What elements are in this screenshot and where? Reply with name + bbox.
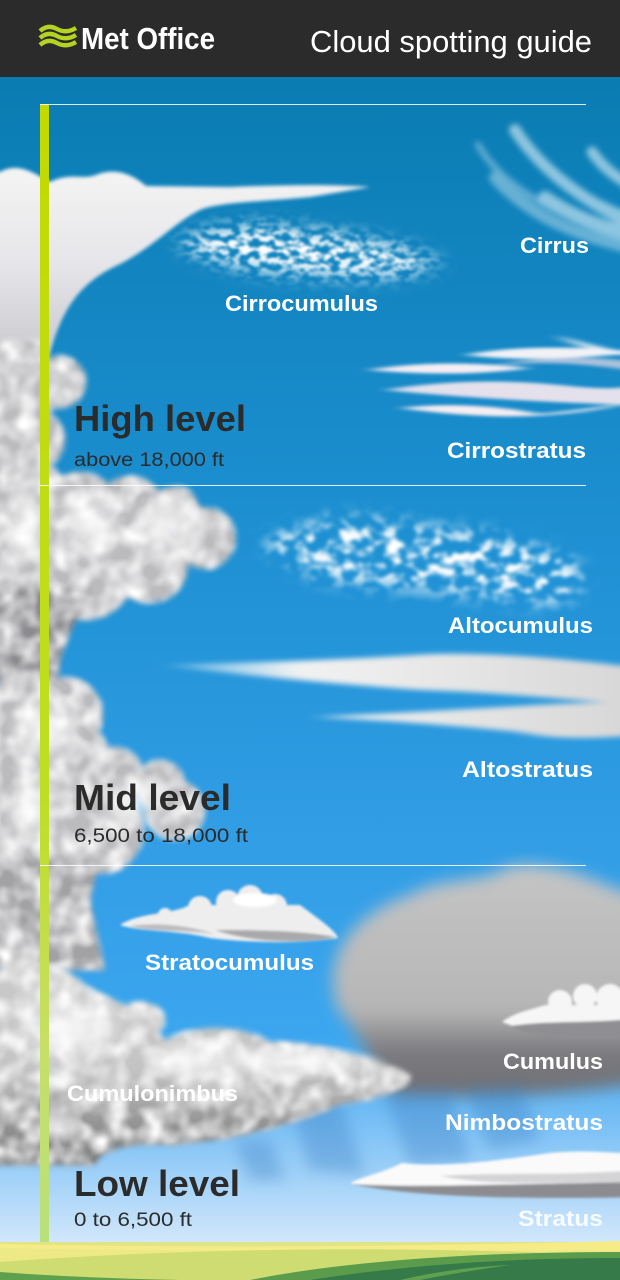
cloud: cumulus — [502, 984, 620, 1039]
heading: low level: 0 to 6,500 ft — [74, 1210, 193, 1231]
heading: mid level: Mid level — [74, 777, 231, 818]
label: Cirrus: Cirrus — [520, 233, 589, 258]
heading: low level — [74, 1163, 240, 1231]
label: Cumulus: Cumulus — [503, 1049, 603, 1074]
divider lines — [40, 104, 586, 866]
label: Stratus: Stratus — [518, 1206, 603, 1231]
cloud: nimbostratus — [333, 865, 620, 1096]
label: Altocumulus: Altocumulus — [448, 613, 593, 638]
cloud: cirrocumulus — [176, 225, 444, 278]
label: Altostratus: Altostratus — [462, 757, 593, 782]
cloud: altocumulus — [262, 519, 583, 603]
cloud: cirrostratus — [368, 335, 620, 416]
heading: low level: Low level — [74, 1163, 240, 1204]
heading: high level: above 18,000 ft — [74, 450, 225, 471]
heading: high level: High level — [74, 398, 246, 439]
puff highlights — [0, 485, 390, 1146]
label: Stratocumulus: Stratocumulus — [145, 950, 314, 975]
label: Nimbostratus: Nimbostratus — [445, 1110, 603, 1135]
logo: Met Office — [40, 21, 215, 56]
landscape — [0, 1241, 620, 1280]
label: Cirrocumulus: Cirrocumulus — [225, 291, 378, 316]
rain shafts — [235, 1085, 540, 1180]
altitude bar — [40, 104, 49, 1243]
low base — [0, 959, 410, 1165]
cloud: cumulonimbus — [0, 168, 410, 1165]
cloud: stratocumulus — [120, 885, 338, 942]
icon: wave mark — [40, 27, 76, 45]
heading: mid level: 6,500 to 18,000 ft — [74, 826, 249, 847]
anvil top — [0, 168, 370, 420]
cloud: altostratus — [165, 654, 620, 738]
title: Cloud spotting guide — [310, 24, 592, 59]
heading: mid level — [74, 777, 249, 847]
cloud: stratus — [350, 1151, 620, 1198]
label: Cirrostratus: Cirrostratus — [447, 438, 586, 463]
label: Cumulonimbus: Cumulonimbus — [67, 1081, 238, 1106]
cloud: cirrus — [478, 130, 620, 250]
tower puffs — [0, 340, 236, 970]
logo wordmark: Met Office — [81, 21, 215, 56]
header bar — [0, 0, 620, 77]
cloud labels — [67, 233, 603, 1231]
heading: high level — [74, 398, 246, 471]
